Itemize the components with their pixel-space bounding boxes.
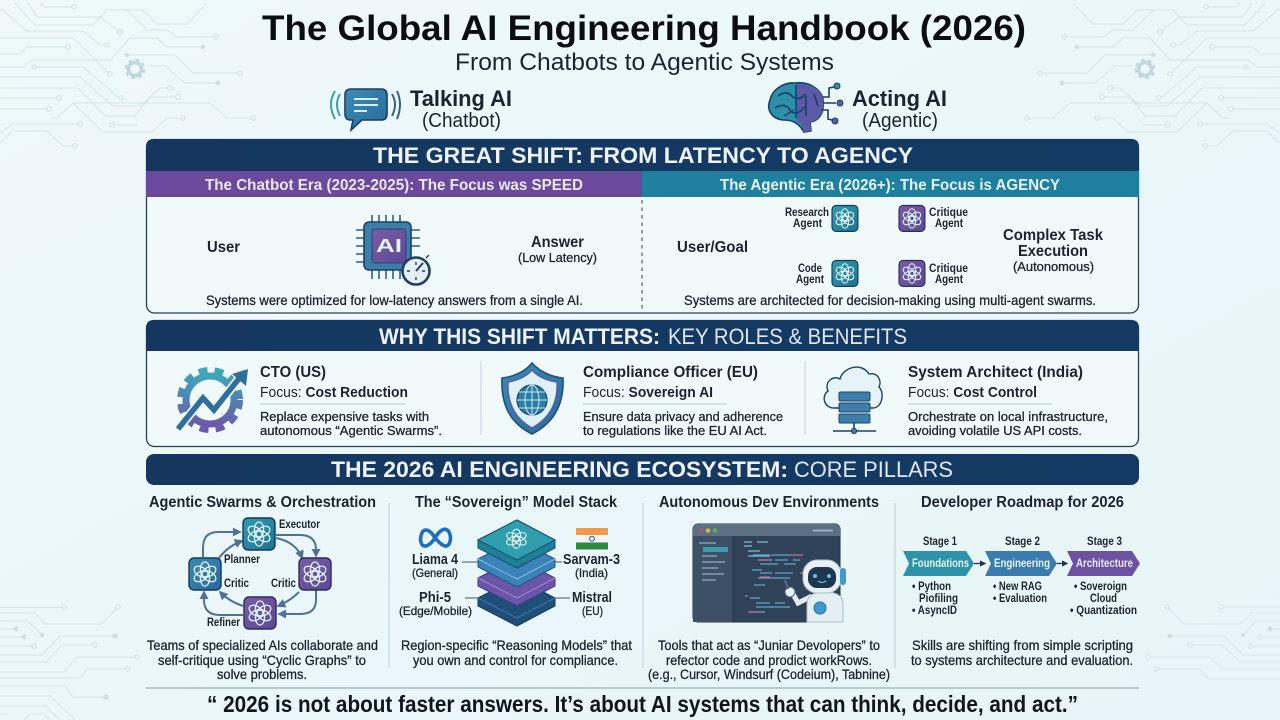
label: llama [412, 552, 458, 580]
label: mistral: Mistral [572, 590, 612, 606]
circuit pattern bottom left [0, 605, 139, 720]
stage 1: • Python [912, 579, 951, 593]
role: system architect: avoiding volatile US API costs. [908, 423, 1082, 438]
heading: why this shift matters [379, 324, 907, 349]
panel header: why this shift matters [146, 320, 1139, 351]
label: Acting AI [852, 86, 947, 132]
diagram: cyclic graph: Planner [224, 554, 260, 566]
label: sarvam: (India) [575, 566, 608, 580]
label: Acting AI: Acting AI [852, 86, 947, 111]
label: Talking AI: (Chatbot) [422, 110, 501, 132]
role: CTO [260, 364, 442, 438]
divider [641, 200, 643, 313]
label: user: User [207, 239, 240, 256]
stage 2: Stage 2 [1005, 534, 1040, 548]
agent: critique bottom: Agent [935, 274, 963, 286]
role: CTO: Replace expensive tasks with [260, 409, 429, 424]
title: The Global AI Engineering Handbook (2026) [262, 9, 1026, 48]
circuit pattern top right [1025, 3, 1280, 148]
text: roadmap description [911, 637, 1133, 668]
heading: core pillars: CORE PILLARS [794, 457, 953, 482]
label: mistral: (EU) [582, 604, 603, 618]
role: compliance officer: Focus: Sovereign AI [583, 384, 713, 401]
icon: AI chip with stopwatch [356, 215, 430, 284]
role: system architect: Orchestrate on local infrastructure, [908, 409, 1108, 424]
text: agentic summary: Systems are architected for decision-making using multi-agent swarms. [684, 292, 1096, 308]
header: ecosystem [146, 454, 1139, 485]
label: user/goal: User/Goal [677, 239, 748, 256]
subtitle: From Chatbots to Agentic Systems [455, 49, 834, 76]
label: complex task execution: (Autonomous) [1013, 259, 1094, 274]
text: roadmap description: Skills are shifting from simple scripting [912, 637, 1133, 653]
label: phi: Phi-5 [419, 590, 451, 606]
role: CTO: Focus: Cost Reduction [260, 384, 408, 401]
stage 1: • AsyncID [912, 603, 957, 617]
agent: critique bottom: Critique [929, 263, 968, 275]
pillar: dev environments [648, 494, 890, 682]
diagram: cyclic graph [189, 518, 331, 629]
icon: india flag [576, 528, 608, 550]
text: stack description: Region-specific “Reasoning Models” that [401, 637, 632, 653]
heading: developer roadmap: Developer Roadmap for 2026 [921, 494, 1124, 511]
diagram: model stack [478, 520, 555, 626]
stage 3 [1067, 534, 1140, 617]
stage 1: Foundations [912, 556, 969, 570]
role: system architect: Focus: Cost Control [908, 384, 1037, 401]
heading: ecosystem: THE 2026 AI ENGINEERING ECOSYSTEM: [331, 457, 788, 482]
stage 3: Architecture [1076, 556, 1133, 570]
role: compliance officer: Ensure data privacy and adherence [583, 409, 783, 424]
arrow: stage 2 to 3 [1057, 562, 1067, 564]
label: Talking AI: Talking AI [410, 86, 512, 111]
label: agentic era: The Agentic Era (2026+): The Focus is AGENCY [720, 177, 1060, 194]
text: dev tools description: (e.g., Cursor, Windsurf (Codeium), Tabnine) [648, 666, 890, 682]
diagram: cyclic graph: Critic [271, 578, 297, 590]
role: compliance officer: Compliance Officer (EU) [583, 364, 758, 381]
agent: critique bottom [899, 260, 968, 286]
role: compliance officer: to regulations like the EU AI Act. [583, 423, 767, 438]
icon: shield with globe [502, 363, 563, 434]
label: complex task execution: Execution [1018, 243, 1088, 260]
text: chatbot summary: Systems were optimized for low-latency answers from a single AI. [206, 292, 583, 308]
heading: why this shift matters: KEY ROLES & BENEFITS [668, 324, 907, 349]
role: CTO: autonomous “Agentic Swarms”. [260, 423, 442, 438]
label: llama: Liama 4 [412, 552, 458, 568]
label: sarvam: Sarvam-3 [563, 552, 620, 568]
label: answer: Answer [531, 234, 584, 251]
stage 1: Stage 1 [923, 534, 957, 548]
stage 2: • Evaluation [993, 591, 1047, 605]
stage 1 [903, 534, 974, 617]
text: swarm description: solve problems. [217, 666, 307, 682]
stage 3: • Soveroign [1074, 579, 1127, 593]
agent: critique top [899, 206, 968, 231]
text: swarm description: self-critique using “Cyclic Graphs” to [158, 652, 366, 668]
icon: cloud with server [824, 367, 882, 434]
icon: AI chip with stopwatch: AI [376, 236, 402, 256]
label: complex task execution: Complex Task [1003, 227, 1103, 244]
icon: gear with rising arrow [178, 369, 248, 430]
diagram: cyclic graph: Critic [224, 578, 250, 590]
stage 2: Engineering [994, 556, 1050, 570]
band: agentic era [642, 171, 1139, 197]
label: answer: (Low Latency) [518, 250, 597, 265]
illustration: code editor [693, 524, 840, 622]
role: compliance officer [583, 364, 783, 438]
circuit pattern bottom right [1146, 605, 1280, 679]
heading: why this shift matters: WHY THIS SHIFT MATTERS: [379, 324, 660, 349]
pillar: agentic swarms [147, 494, 378, 682]
panel: why this shift matters [146, 320, 1139, 446]
text: dev tools description: refector code and prodict workRows. [666, 652, 872, 668]
agent: code: Agent [796, 274, 824, 286]
panel: the great shift [146, 139, 1139, 313]
agent: critique top: Agent [935, 218, 963, 230]
circuit pattern top left [0, 3, 255, 148]
text: roadmap description: to systems architecture and evaluation. [911, 652, 1133, 668]
text: swarm description: Teams of specialized AIs collaborate and [147, 637, 378, 653]
stage 3: Stage 3 [1087, 534, 1122, 548]
agent: research: Agent [793, 218, 822, 230]
arrow: stage 1 to 2 [974, 562, 985, 564]
stage 3: Cloud [1090, 591, 1117, 605]
agent: critique top: Critique [929, 207, 968, 219]
pillar: sovereign stack [399, 494, 632, 668]
label: complex task execution [1003, 227, 1103, 274]
heading: dev environments: Autonomous Dev Environments [659, 494, 879, 511]
label: mistral [572, 590, 612, 618]
illustration: robot [785, 560, 846, 622]
role: system architect: System Architect (India) [908, 364, 1083, 381]
diagram: cyclic graph: Refiner [207, 617, 240, 629]
label: phi: (Edge/Mobile) [399, 604, 472, 618]
role: system architect [908, 364, 1108, 438]
role: CTO: CTO (US) [260, 364, 326, 381]
label: llama: (General) [412, 566, 458, 580]
label: Talking AI [410, 86, 512, 132]
text: dev tools description [648, 637, 890, 682]
pillar: developer roadmap [903, 494, 1140, 668]
text: stack description [401, 637, 632, 668]
panel header: great shift [146, 139, 1139, 171]
agent: code [796, 260, 858, 286]
heading: agentic swarms: Agentic Swarms & Orchestration [149, 494, 376, 511]
text: dev tools description: Tools that act as “Juniar Devolopers” to [658, 637, 880, 653]
stage 2: • New RAG [993, 579, 1042, 593]
agent: research: Research [785, 207, 829, 219]
quote: “ 2026 is not about faster answers. It’s about AI systems that can think, decide, and act.” [207, 691, 1078, 717]
band: chatbot era [146, 171, 642, 197]
label: phi [399, 590, 472, 618]
label: chatbot era: The Chatbot Era (2023-2025): The Focus was SPEED [205, 177, 583, 194]
heading: sovereign stack: The “Sovereign” Model Stack [415, 494, 617, 511]
label: answer [518, 234, 597, 265]
icon: brain with circuits [769, 83, 843, 132]
stage 1: Piofiling [919, 591, 958, 605]
stage 2 [985, 534, 1057, 605]
text: swarm description [147, 637, 378, 682]
icon: chat bubble [331, 89, 400, 130]
text: stack description: you own and control for compliance. [413, 652, 618, 668]
label: sarvam [563, 552, 620, 580]
label: Acting AI: (Agentic) [862, 110, 938, 132]
agent: code: Code [798, 263, 822, 275]
diagram: cyclic graph: Executor [279, 519, 320, 531]
stage 3: • Quantization [1070, 603, 1137, 617]
icon: meta logo [421, 529, 450, 546]
heading: great shift: THE GREAT SHIFT: FROM LATENCY TO AGENCY [373, 143, 913, 168]
agent: research [785, 206, 858, 231]
